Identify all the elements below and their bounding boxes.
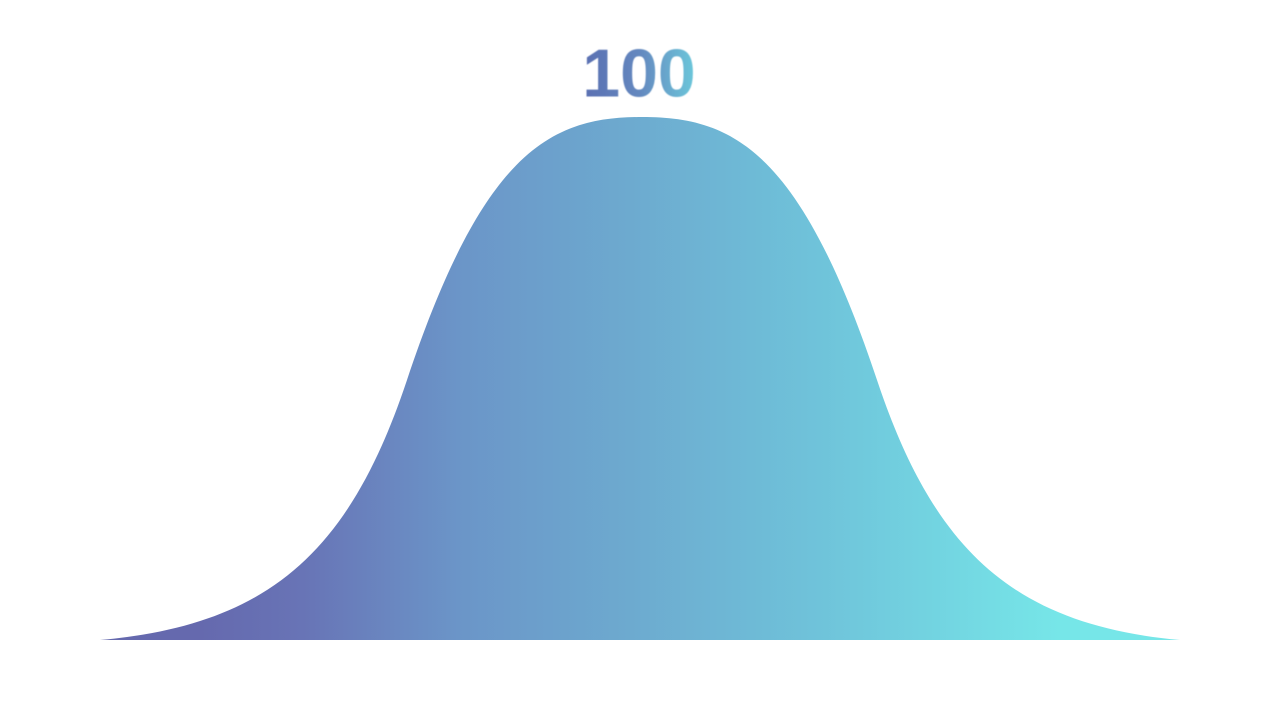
peak value: 100: 100 bbox=[582, 36, 696, 112]
bell curve shape bbox=[100, 117, 1180, 640]
